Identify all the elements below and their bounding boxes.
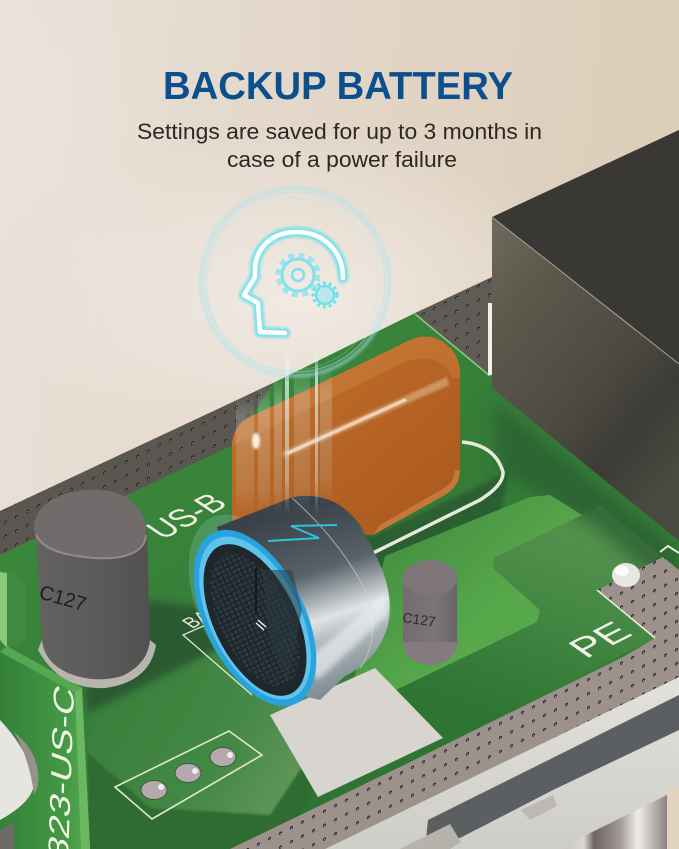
front rail [325,677,679,849]
capacitor shadow [85,600,228,713]
BAT label and box: BA [178,608,218,632]
icon: head with gears in a glowing circle [201,188,389,376]
large capacitor [34,490,156,688]
usb port plug [0,720,34,820]
shadow along box base [492,400,679,600]
large gear [278,255,318,295]
white silk outline [373,442,503,553]
battery body [217,496,390,700]
text: US-B: US-B [138,488,235,544]
solder pads with silk box [115,731,262,819]
dark shadow region around orange capacitor [230,470,510,640]
head glow [244,232,343,333]
BAT label and box [178,608,252,695]
capacitor marking: C127 [37,582,89,616]
small capacitor [402,560,458,665]
right ground plane [300,505,663,816]
battery face pattern [192,540,318,700]
orange capacitor [232,336,460,535]
black transformer box [492,130,679,541]
lightning bolt [268,525,337,541]
small capacitor marking: C127 [402,609,437,630]
glass dome on board [612,563,640,587]
subtitle: case of a power failure [227,147,457,172]
small gear [313,283,337,307]
lower-left lit trace [87,645,330,815]
circuit board base [0,313,679,849]
glowing rings [201,188,389,376]
silver pad under battery [270,668,443,797]
lower-left dark plane [87,713,345,849]
subtitle: Settings are saved for up to 3 months in [137,119,542,144]
bright copper trace [345,495,582,715]
perforated strip: bottom edge [230,546,679,849]
subtitle [137,119,542,172]
coin battery [162,494,390,726]
light beams [236,345,332,515]
silver cylinders below rail [563,788,679,849]
title: BACKUP BATTERY [163,65,513,108]
head outline [244,232,343,333]
perforated strip: top right corner [415,277,492,376]
blue rim [168,511,342,725]
left green block [0,570,90,849]
cyan halo [162,494,350,726]
perforated strip: top edge [0,383,273,555]
text: PE: PE [560,616,641,664]
